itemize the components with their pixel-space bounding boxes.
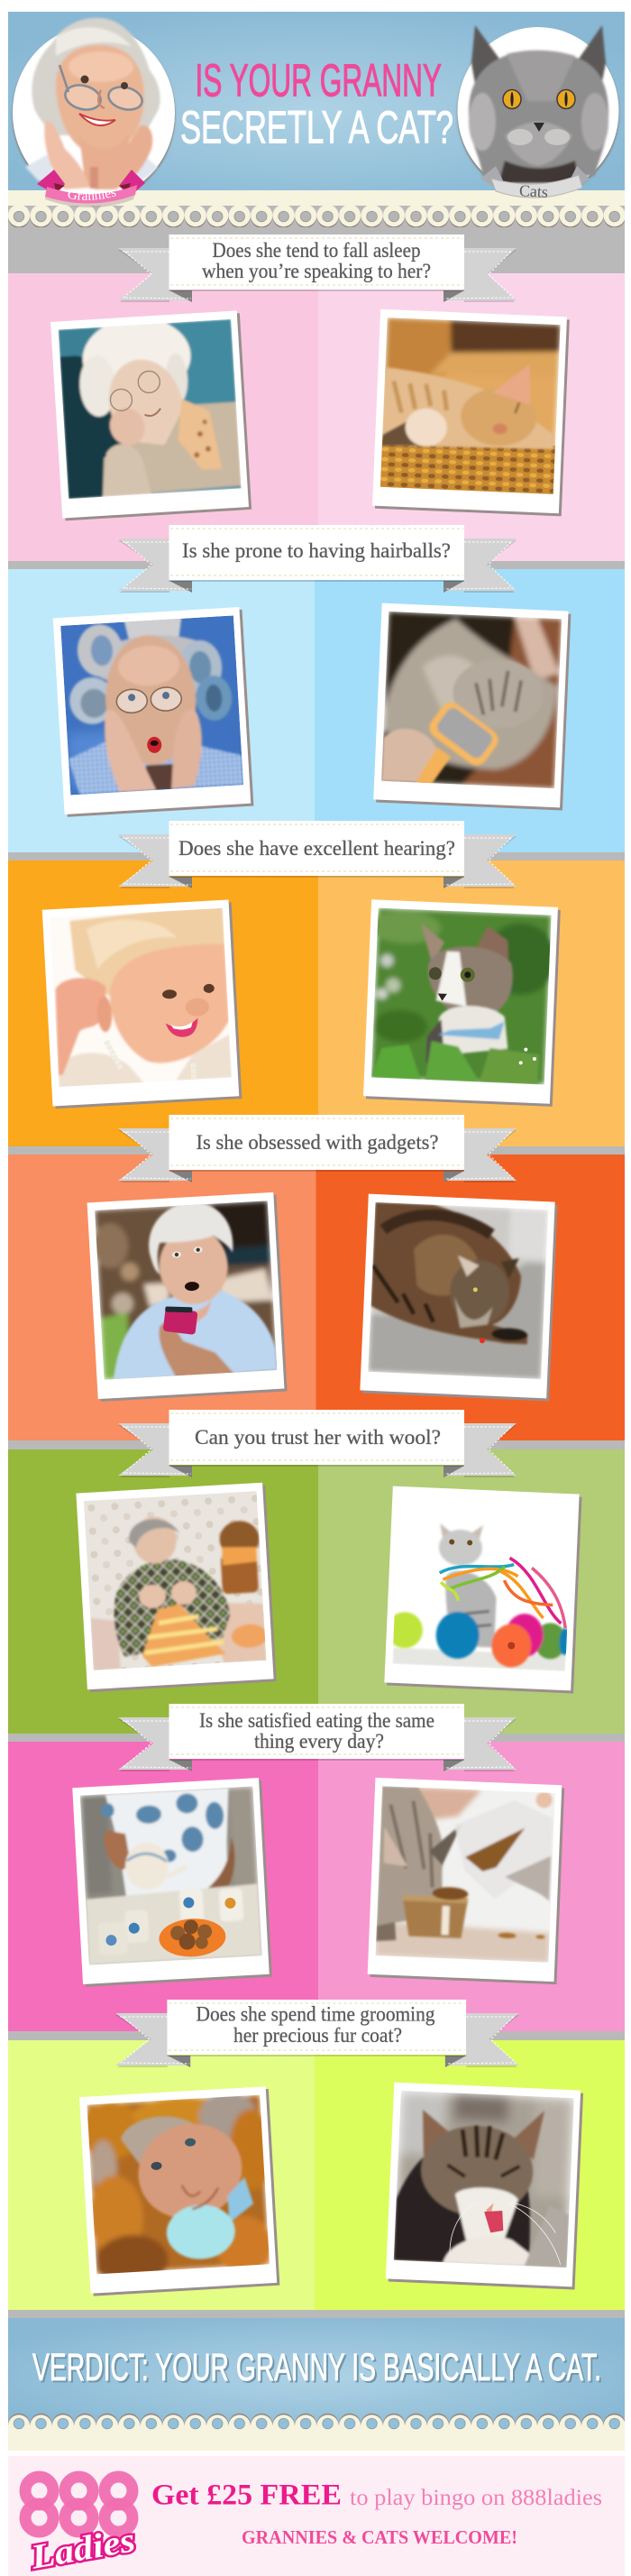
icon: grey ribbon Cats: Cats: [518, 181, 549, 201]
panel: section 2 blue: [8, 569, 625, 860]
photo: granny knitting: [76, 1483, 277, 1692]
icon: grey ribbon Cats: [480, 166, 590, 201]
panel: section 6 hot pink: [8, 1742, 625, 2040]
icon: pink ribbon Grannies: Grannies: [69, 189, 116, 200]
banner: question 7: her precious fur coat?: [233, 2024, 402, 2047]
photo: tea tray and biscuits: [72, 1778, 272, 1987]
banner: question 6: [118, 1704, 517, 1771]
panel: section 5 green: [8, 1449, 625, 1742]
panel: header: [8, 12, 625, 229]
banner: question 3: Does she have excellent hearing?: [178, 837, 455, 860]
panel: section 7 lime: [8, 2040, 625, 2318]
photo: surprised granny with phone: [87, 1192, 288, 1402]
banner: question 7: [115, 2000, 519, 2067]
photo: fluffy cat chasing laser dot: [360, 1194, 558, 1402]
icon: granny portrait in oval: [13, 18, 175, 199]
photo: sleeping ginger cat: [372, 309, 570, 516]
banner: question 2: [118, 525, 517, 593]
photo: granny asleep: [50, 310, 251, 521]
banner: question 2: Is she prone to having hairballs?: [182, 539, 451, 562]
banner: question 1: [118, 235, 517, 302]
banner: question 6: Is she satisfied eating the same: [199, 1709, 434, 1732]
icon: cat portrait in oval: [458, 25, 618, 195]
banner: question 5: Can you trust her with wool?: [195, 1426, 441, 1449]
panel: footer promo: [8, 2456, 625, 2576]
banner: question 1: when you’re speaking to her?: [202, 260, 431, 282]
photo: alert tabby kitten in grass: [361, 899, 561, 1107]
banner: question 3: [118, 821, 517, 888]
photo: cat eating kibble from bowl: [368, 1778, 564, 1984]
section backgrounds: grey strip under header: [8, 227, 625, 273]
banner: question 6: thing every day?: [254, 1730, 384, 1753]
title: SECRETLY A CAT?: [180, 101, 453, 153]
photo: cat being brushed: [373, 603, 572, 811]
photo: granny cupping her ear: [42, 899, 242, 1109]
banner: question 5: [118, 1410, 517, 1477]
photo: granny in fur hood: [78, 2086, 282, 2296]
banner: question 4: [118, 1115, 517, 1182]
panel: section 4 salmon: [8, 1155, 625, 1449]
icon: pink ribbon Grannies: [37, 170, 145, 207]
tagline: GRANNIES & CATS WELCOME!: [242, 2526, 517, 2548]
title: [180, 54, 453, 153]
offer headline: Get £25 FREE: [151, 2479, 342, 2511]
photo: tabby cat licking paw: [386, 2083, 583, 2290]
offer headline: [151, 2479, 602, 2511]
logo: 888 Ladies: Ladies: [27, 2521, 138, 2576]
logo: 888 Ladies: [25, 2477, 138, 2576]
panel: section 3 orange: [8, 860, 625, 1155]
title: IS YOUR GRANNY: [195, 54, 442, 106]
panel: verdict: [8, 2318, 625, 2451]
photo: granny in hair rollers: [53, 607, 253, 817]
banner: question 4: Is she obsessed with gadgets?: [197, 1131, 438, 1154]
banner: question 1: Does she tend to fall asleep: [213, 239, 420, 262]
offer headline: to play bingo on 888ladies: [350, 2486, 602, 2510]
panel: section 1 pink: [8, 273, 625, 570]
photo: kitten tangled in yarn: [384, 1486, 582, 1694]
banner: question 7: Does she spend time grooming: [197, 2002, 435, 2026]
